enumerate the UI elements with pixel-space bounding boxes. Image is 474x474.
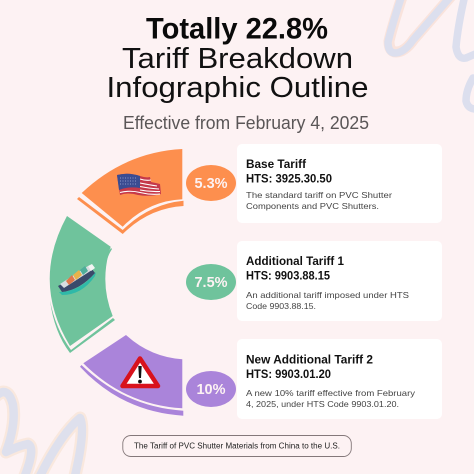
icon: warning triangle xyxy=(122,358,158,386)
panel: new additional tariff 2 card: HTS: 9903.01.20 xyxy=(246,369,331,381)
panel: purple segment xyxy=(80,335,183,416)
panel: new additional tariff 2 card: 4, 2025, under HTS Code 9903.01.20. xyxy=(246,399,399,409)
panel: base tariff card: Components and PVC Shutters. xyxy=(246,201,379,211)
panel: new additional tariff 2 card xyxy=(237,339,442,419)
panel: orange segment xyxy=(77,149,184,234)
panel: additional tariff 1 card: An additional tariff imposed under HTS xyxy=(246,290,410,300)
badge: 7.5% xyxy=(186,264,236,300)
panel: new additional tariff 2 card: New Additional Tariff 2 xyxy=(246,354,373,366)
panel: base tariff card xyxy=(237,144,442,223)
badge: 10% xyxy=(186,371,236,407)
footer pill: The Tariff of PVC Shutter Materials from China to the U.S. xyxy=(134,442,340,450)
panel: base tariff card: Base Tariff xyxy=(246,159,306,171)
title xyxy=(106,12,368,104)
panel: additional tariff 1 card xyxy=(237,241,442,321)
title: Tariff Breakdown xyxy=(122,43,353,75)
panel: green segment xyxy=(50,216,115,353)
panel: new additional tariff 2 card: A new 10% tariff effective from February xyxy=(246,388,416,398)
icon: container ship xyxy=(58,264,96,295)
badge: 5.3%: 5.3% xyxy=(194,176,228,192)
subtitle: Effective from February 4, 2025 xyxy=(123,113,369,133)
icon: US flag xyxy=(117,174,161,196)
badge: 10%: 10% xyxy=(196,382,226,398)
panel: base tariff card: HTS: 3925.30.50 xyxy=(246,174,332,186)
footer pill xyxy=(123,436,351,456)
badge: 5.3% xyxy=(186,165,236,201)
panel: additional tariff 1 card: HTS: 9903.88.15 xyxy=(246,270,331,282)
panel: base tariff card: The standard tariff on PVC Shutter xyxy=(246,190,392,200)
badge: 7.5%: 7.5% xyxy=(194,275,228,291)
panel: additional tariff 1 card: Code 9903.88.15. xyxy=(246,301,316,311)
title: Totally 22.8% xyxy=(146,12,328,46)
panel: additional tariff 1 card: Additional Tariff 1 xyxy=(246,256,345,268)
title: Infographic Outline xyxy=(106,72,368,104)
